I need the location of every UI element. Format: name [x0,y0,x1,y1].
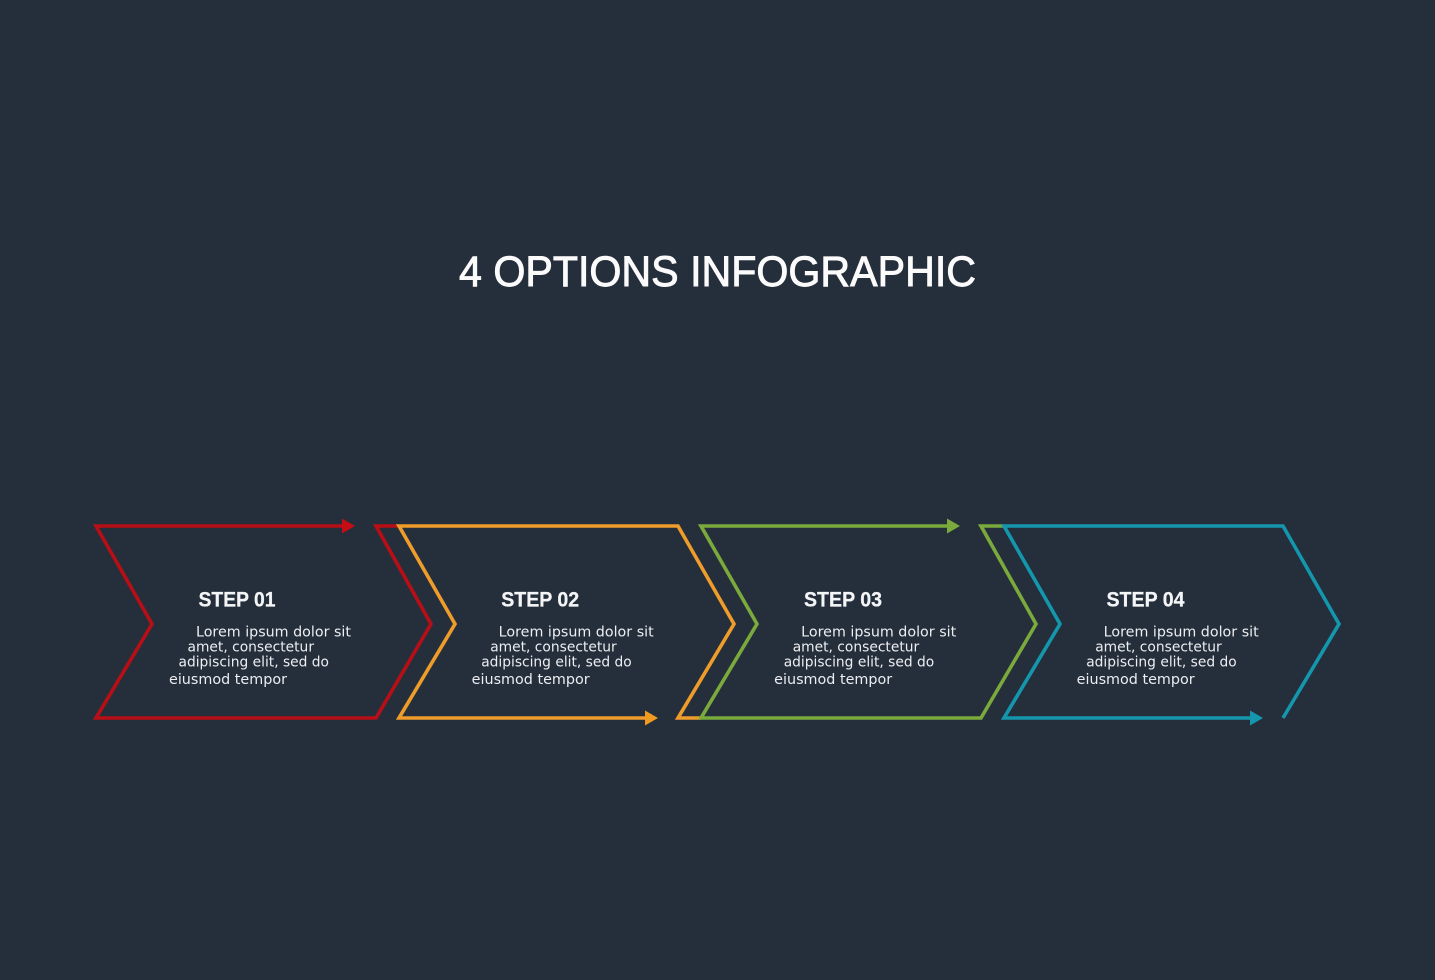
heading: step 03: STEP 03 [804,588,882,612]
panel: step 03 [701,518,1036,718]
text block: step 01: adipiscing elit, sed do [178,654,329,670]
text block: step 03: adipiscing elit, sed do [784,654,934,670]
text block: step 01: eiusmod tempor [169,672,287,688]
text block: step 02 [472,624,654,688]
text block: step 01: amet, consectetur [188,640,314,656]
text block: step 03: amet, consectetur [793,640,919,656]
panel: step 01 [96,518,431,718]
arrowhead: step 02 [645,710,658,726]
arrowhead: step 03 [947,518,960,534]
text block: step 04: Lorem ipsum dolor sit [1104,624,1259,640]
heading: step 01: STEP 01 [198,588,276,612]
text block: step 03: eiusmod tempor [774,672,892,688]
text block: step 04: amet, consectetur [1095,640,1222,656]
panel: step 02 [399,526,734,726]
chevron outline: step 01 [96,526,431,718]
title: 4 OPTIONS INFOGRAPHIC [459,248,976,296]
chevron outline: step 04 [1004,526,1339,718]
text block: step 03: Lorem ipsum dolor sit [801,624,957,640]
chevron outline: step 03 [701,526,1036,718]
text block: step 01 [169,624,352,688]
text block: step 01: Lorem ipsum dolor sit [196,624,352,640]
chevron outline: step 02 [399,526,734,718]
panel: step 04 [1004,526,1339,726]
text block: step 02: amet, consectetur [490,640,617,656]
arrowhead: step 01 [342,518,355,534]
text block: step 04 [1077,624,1259,688]
text block: step 03 [774,624,957,688]
arrowhead: step 04 [1250,710,1263,726]
heading: step 02: STEP 02 [501,588,579,612]
text block: step 02: adipiscing elit, sed do [481,654,632,670]
text block: step 02: Lorem ipsum dolor sit [499,624,654,640]
text block: step 04: eiusmod tempor [1077,672,1195,688]
text block: step 04: adipiscing elit, sed do [1086,654,1237,670]
text block: step 02: eiusmod tempor [472,672,590,688]
heading: step 04: STEP 04 [1106,588,1185,612]
